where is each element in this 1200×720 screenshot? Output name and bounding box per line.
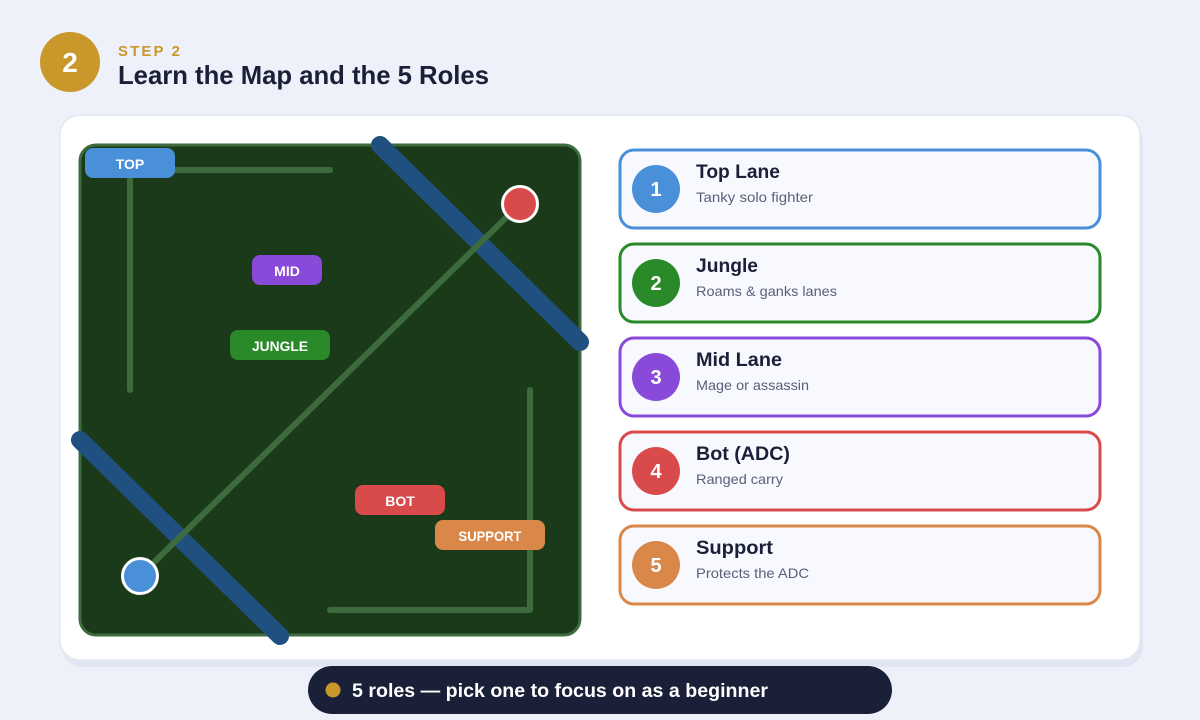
- role card: top lane: [620, 150, 1100, 228]
- role card: jungle: [620, 244, 1100, 322]
- role card: support: Support: [696, 538, 774, 559]
- lane: mid: [140, 204, 520, 576]
- role card: top lane: 1: [650, 179, 662, 201]
- callout: takeaway pill: 5 roles — pick one to focus on as a beginner: [352, 681, 769, 702]
- lane: bottom: [330, 390, 530, 610]
- map label: jungle: [230, 330, 330, 360]
- map label: top: TOP: [116, 156, 144, 172]
- map label: support: [435, 520, 545, 550]
- role card: mid lane: Mage or assassin: [696, 377, 809, 393]
- base: red: [502, 186, 538, 222]
- role card: mid lane: 3: [650, 367, 662, 389]
- role card: mid lane: Mid Lane: [696, 350, 782, 371]
- role card: jungle: Jungle: [696, 256, 758, 277]
- map label: mid: MID: [274, 263, 300, 279]
- step badge: 2: [62, 47, 78, 78]
- map label: bot: [355, 485, 445, 515]
- role card: mid lane: [620, 338, 1100, 416]
- role card: bot: Bot (ADC): [696, 444, 790, 465]
- base: blue: [122, 558, 158, 594]
- role card: bot: 4: [650, 461, 662, 483]
- title: Learn the Map and the 5 Roles: [118, 60, 489, 90]
- map label: mid: [252, 255, 322, 285]
- role card: bot: [620, 432, 1100, 510]
- role card: top lane: Tanky solo fighter: [696, 189, 813, 205]
- step label: STEP 2: [118, 43, 180, 60]
- map background: [80, 145, 580, 635]
- role card: support: 5: [650, 555, 662, 577]
- role card: bot: Ranged carry: [696, 471, 783, 487]
- role card: jungle: Roams & ganks lanes: [696, 283, 837, 299]
- step badge: [40, 32, 100, 92]
- map label: top: [85, 148, 175, 178]
- role card: support: [620, 526, 1100, 604]
- role card: support: Protects the ADC: [696, 565, 809, 581]
- header: [40, 32, 489, 92]
- callout: takeaway pill: [308, 666, 892, 714]
- map label: jungle: JUNGLE: [252, 338, 308, 354]
- river: lower: [80, 440, 280, 636]
- panel: role list: [620, 150, 1100, 604]
- role card: top lane: Top Lane: [696, 162, 780, 183]
- role card: jungle: 2: [650, 273, 662, 295]
- river: upper: [380, 145, 580, 342]
- panel: main card: [60, 115, 1143, 667]
- lane: top: [130, 170, 330, 390]
- panel: map: [80, 145, 580, 636]
- map label: support: SUPPORT: [458, 528, 522, 544]
- map label: bot: BOT: [385, 493, 415, 509]
